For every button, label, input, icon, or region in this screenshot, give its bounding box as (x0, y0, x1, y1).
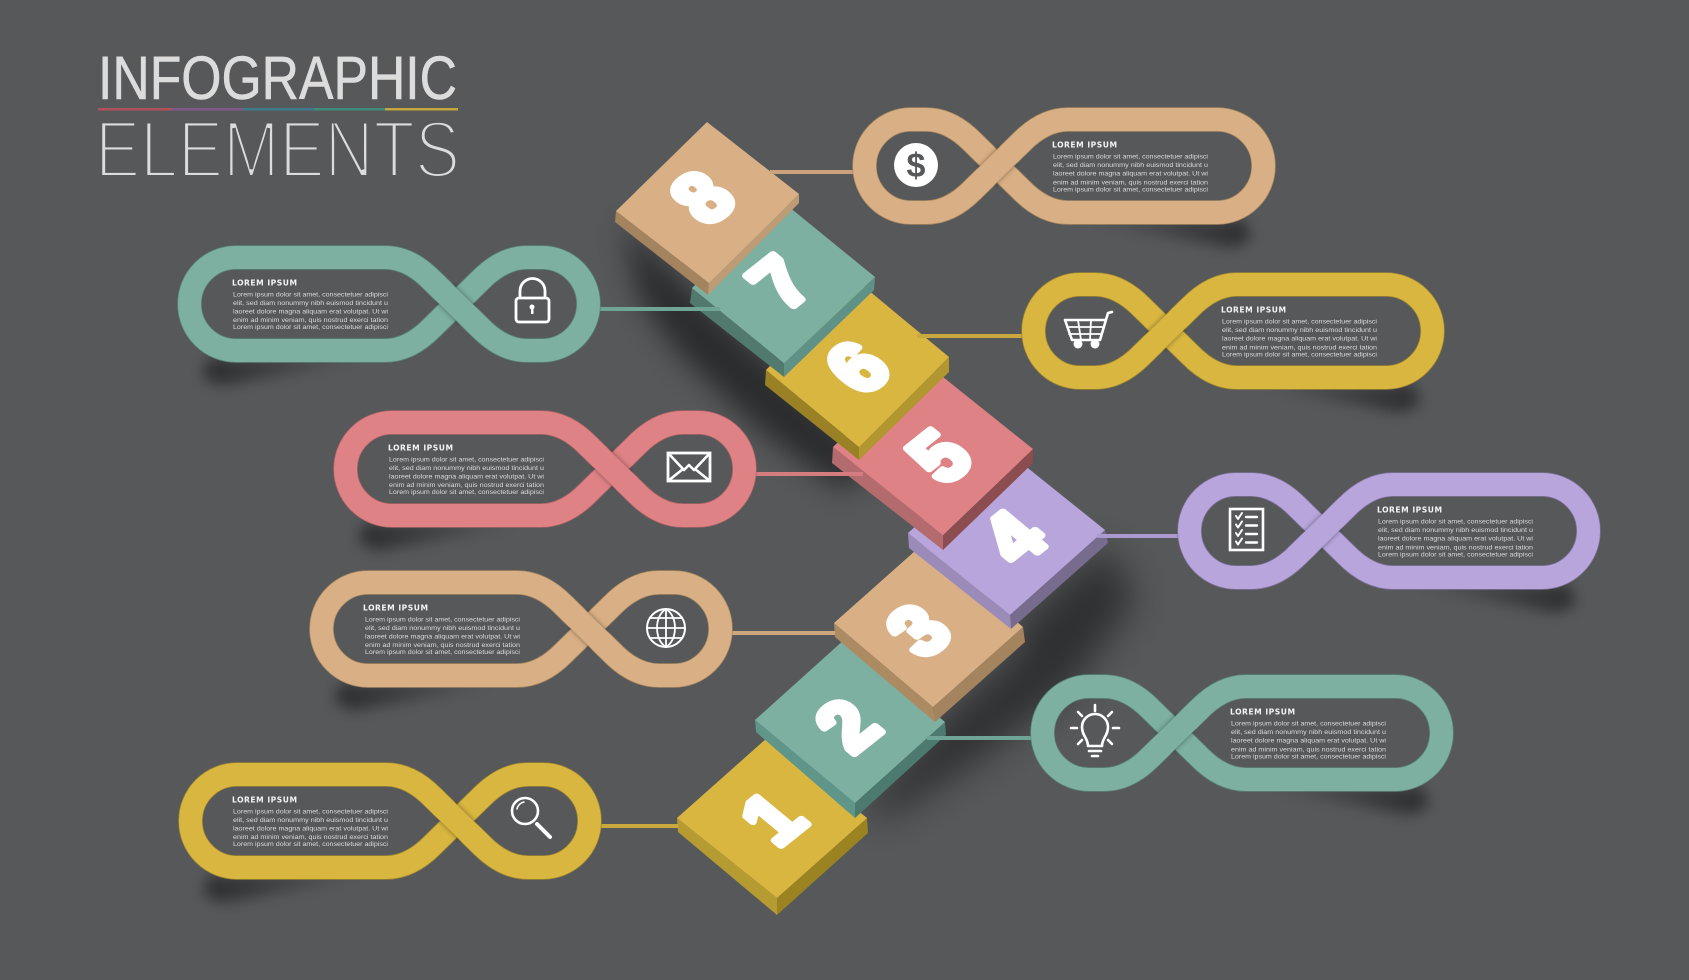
block 7 (690, 202, 875, 377)
panel: dollar ribbon (864, 120, 1264, 248)
text block: envelope: LOREM IPSUM (388, 444, 453, 452)
text block: lightbulb (1230, 708, 1386, 760)
text block: envelope (388, 444, 544, 496)
text block: cart: Lorem ipsum dolor sit amet, consectetuer adipisci (1222, 352, 1377, 358)
text block: lightbulb: enim ad minim veniam, quis nostrud exerci tation (1231, 746, 1386, 754)
block 5: 5 (890, 416, 990, 498)
panel: cart ribbon (1034, 284, 1432, 413)
text block: globe (363, 604, 520, 656)
icon: checklist (1230, 509, 1263, 550)
panel: lock ribbon (190, 258, 588, 386)
text block: globe: Lorem ipsum dolor sit amet, consectetuer adipisci (365, 649, 520, 656)
text block: magnifier: LOREM IPSUM (232, 796, 297, 804)
icon: padlock (516, 278, 549, 322)
text block: lock (232, 278, 388, 331)
text block: globe: Lorem ipsum dolor sit amet, consectetuer adipisci (365, 616, 520, 624)
text block: magnifier (232, 796, 388, 848)
block 8: 8 (653, 157, 753, 239)
panel: envelope ribbon (346, 422, 744, 551)
text block: lightbulb: LOREM IPSUM (1230, 708, 1295, 716)
text block: cart: enim ad minim veniam, quis nostrud exerci tation (1222, 344, 1377, 352)
block 2 (755, 639, 946, 818)
text block: lightbulb: laoreet dolore magna aliquam erat volutpat. Ut wi (1231, 738, 1386, 744)
text block: globe: enim ad minim veniam, quis nostrud exerci tation (365, 642, 520, 649)
icon: shopping cart (1065, 312, 1112, 348)
text block: dollar: elit, sed diam nonummy nibh euismod tincidunt u (1053, 162, 1208, 169)
panel: globe ribbon (322, 582, 720, 711)
block 6: 6 (808, 327, 908, 409)
icon: dollar coin (894, 143, 938, 187)
text block: checklist (1377, 506, 1533, 558)
block cast shadow: upper run (622, 222, 880, 490)
block cast shadow: lower run (860, 545, 1135, 815)
panel: lightbulb ribbon (1042, 686, 1442, 815)
text block: dollar: Lorem ipsum dolor sit amet, consectetuer adipisci (1053, 154, 1208, 160)
connector lines (599, 172, 1180, 826)
text block: dollar: LOREM IPSUM (1052, 140, 1117, 150)
block 4 (908, 448, 1108, 629)
text block: globe: laoreet dolore magna aliquam erat volutpat. Ut wi (365, 634, 520, 640)
text block: cart: LOREM IPSUM (1221, 306, 1286, 314)
title: ELEMENTS (95, 105, 460, 195)
text block: cart: elit, sed diam nonummy nibh euismod tincidunt u (1222, 327, 1377, 334)
block 3 (834, 543, 1025, 722)
text block: checklist: laoreet dolore magna aliquam erat volutpat. Ut wi (1378, 536, 1533, 542)
text block: dollar (1052, 140, 1208, 194)
text block: globe: elit, sed diam nonummy nibh euismod tincidunt u (365, 625, 520, 632)
text block: lightbulb: elit, sed diam nonummy nibh euismod tincidunt u (1231, 729, 1386, 736)
block 1: 1 (723, 778, 823, 860)
text block: magnifier: laoreet dolore magna aliquam erat volutpat. Ut wi (233, 826, 388, 832)
text block: lock: laoreet dolore magna aliquam erat volutpat. Ut wi (233, 308, 388, 316)
rainbow divider (98, 108, 458, 110)
text block: lock: enim ad minim veniam, quis nostrud exerci tation (233, 317, 388, 324)
icon: envelope (668, 453, 710, 481)
text block: envelope: laoreet dolore magna aliquam erat volutpat. Ut wi (389, 474, 544, 480)
text block: envelope: Lorem ipsum dolor sit amet, consectetuer adipisci (389, 489, 544, 496)
text block: magnifier: elit, sed diam nonummy nibh euismod tincidunt u (233, 817, 388, 824)
text block: checklist: LOREM IPSUM (1377, 506, 1442, 514)
icon: magnifier (512, 798, 550, 837)
block 8 (615, 122, 799, 295)
icon: dollar coin: $ (907, 147, 926, 185)
text block: lock: LOREM IPSUM (232, 278, 297, 288)
block 6 (765, 280, 949, 460)
text block: dollar: laoreet dolore magna aliquam erat volutpat. Ut wi (1053, 170, 1208, 178)
text block: dollar: Lorem ipsum dolor sit amet, consectetuer adipisci (1053, 186, 1208, 194)
text block: lock: Lorem ipsum dolor sit amet, consectetuer adipisci (233, 324, 388, 331)
icon: lightbulb (1071, 705, 1119, 756)
text block: lock: Lorem ipsum dolor sit amet, consectetuer adipisci (233, 292, 388, 298)
text block: envelope: elit, sed diam nonummy nibh euismod tincidunt u (389, 465, 544, 472)
text block: lightbulb: Lorem ipsum dolor sit amet, consectetuer adipisci (1231, 754, 1386, 760)
text block: checklist: Lorem ipsum dolor sit amet, consectetuer adipisci (1378, 518, 1533, 526)
text block: dollar: enim ad minim veniam, quis nostrud exerci tation (1053, 180, 1208, 186)
text block: cart: laoreet dolore magna aliquam erat volutpat. Ut wi (1222, 336, 1377, 342)
text block: envelope: enim ad minim veniam, quis nostrud exerci tation (389, 482, 544, 489)
text block: envelope: Lorem ipsum dolor sit amet, consectetuer adipisci (389, 456, 544, 464)
panel: magnifier ribbon (190, 774, 590, 903)
text block: lock: elit, sed diam nonummy nibh euismod tincidunt u (233, 300, 388, 307)
title: INFOGRAPHIC (98, 44, 457, 112)
text block: magnifier: Lorem ipsum dolor sit amet, consectetuer adipisci (233, 808, 388, 816)
text block: lightbulb: Lorem ipsum dolor sit amet, consectetuer adipisci (1231, 720, 1386, 728)
block 2: 2 (798, 685, 898, 767)
icon: globe (647, 609, 685, 647)
text block: checklist: Lorem ipsum dolor sit amet, consectetuer adipisci (1378, 552, 1533, 558)
block 4: 4 (964, 497, 1064, 579)
text block: globe: LOREM IPSUM (363, 604, 428, 612)
panel: checklist ribbon (1190, 484, 1588, 613)
text block: cart (1221, 306, 1377, 358)
block 1 (677, 738, 868, 915)
text block: magnifier: enim ad minim veniam, quis nostrud exerci tation (233, 834, 388, 841)
text block: magnifier: Lorem ipsum dolor sit amet, consectetuer adipisci (233, 841, 388, 848)
text block: checklist: elit, sed diam nonummy nibh euismod tincidunt u (1378, 527, 1533, 534)
block 3: 3 (869, 590, 969, 672)
title (95, 44, 460, 195)
text block: checklist: enim ad minim veniam, quis nostrud exerci tation (1378, 544, 1533, 552)
block 5 (832, 361, 1033, 550)
block 7: 7 (731, 242, 831, 324)
text block: cart: Lorem ipsum dolor sit amet, consectetuer adipisci (1222, 318, 1377, 326)
